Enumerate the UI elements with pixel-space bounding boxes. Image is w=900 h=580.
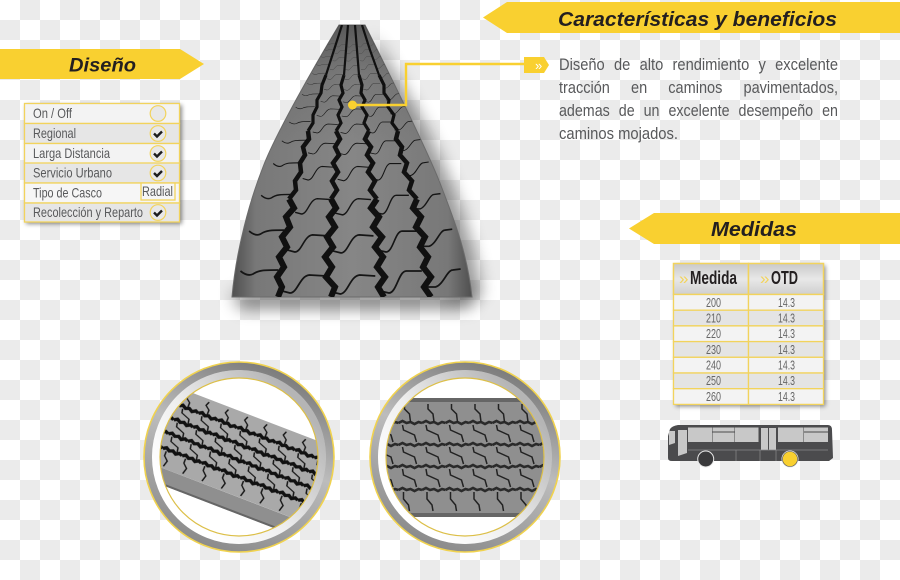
image: tire tread in perspective xyxy=(232,25,482,308)
row: On / Off xyxy=(24,104,180,124)
row: Larga Distancia xyxy=(24,144,180,164)
circular detail: tread angled view xyxy=(143,361,335,553)
table header: OTD xyxy=(771,268,798,288)
text block: benefits description: ademas de un excelente desempeño en xyxy=(559,101,838,120)
circular detail: tread front view xyxy=(370,362,565,552)
row: Servicio Urbano xyxy=(24,163,180,183)
row: Tipo de Casco: Tipo de Casco xyxy=(33,184,102,200)
table values: 240 xyxy=(706,358,721,372)
table: Medida / OTD xyxy=(674,264,824,404)
table values: 200 xyxy=(706,295,721,310)
panel: design feature table xyxy=(24,103,180,222)
row: Regional: Regional xyxy=(33,125,76,141)
row: Servicio Urbano: Servicio Urbano xyxy=(33,164,112,180)
row: Tipo de Casco xyxy=(24,183,180,203)
table values: 14.3 xyxy=(778,373,795,388)
table values: 14.3 xyxy=(778,326,795,341)
table rows xyxy=(674,294,824,404)
banner: Características y beneficios xyxy=(483,2,900,33)
callout connector with dot and arrow tag xyxy=(348,57,549,110)
table values: 210 xyxy=(706,310,721,326)
row: Larga Distancia: Larga Distancia xyxy=(33,145,110,161)
table values: 260 xyxy=(706,389,721,404)
banner: Diseño: Diseño xyxy=(69,54,136,76)
text block: benefits description: tracción en caminos pavimentados, xyxy=(559,78,838,97)
banner: Medidas: Medidas xyxy=(711,219,797,241)
table values xyxy=(706,295,795,404)
row: On / Off: On / Off xyxy=(33,105,72,121)
row: Regional xyxy=(24,124,180,144)
text block: benefits description xyxy=(559,55,838,143)
banner: Características y beneficios: Características y beneficios xyxy=(558,8,837,31)
table values: 14.3 xyxy=(778,342,795,357)
table values: 230 xyxy=(706,342,721,357)
table values: 14.3 xyxy=(778,310,795,326)
table values: 220 xyxy=(706,326,721,341)
table values: 250 xyxy=(706,373,721,388)
row: Tipo de Casco: Radial xyxy=(142,183,173,199)
icon: bus with highlighted rear wheel xyxy=(668,425,833,468)
text block: benefits description: caminos mojados. xyxy=(559,124,678,143)
callout connector with dot and arrow tag: » xyxy=(535,58,542,73)
table header: » xyxy=(679,269,688,288)
table values: 14.3 xyxy=(778,295,795,310)
sipes xyxy=(240,43,461,294)
banner: Medidas xyxy=(629,213,900,244)
table header: Medida xyxy=(690,268,738,288)
grooves xyxy=(277,25,431,297)
row: Recolección y Reparto: Recolección y Reparto xyxy=(33,204,143,220)
table values: 14.3 xyxy=(778,389,795,404)
text block: benefits description: Diseño de alto rendimiento y excelente xyxy=(559,55,838,74)
table header: » xyxy=(760,269,769,288)
table values: 14.3 xyxy=(778,358,795,372)
table header xyxy=(674,264,824,294)
banner: Diseño xyxy=(0,49,204,79)
